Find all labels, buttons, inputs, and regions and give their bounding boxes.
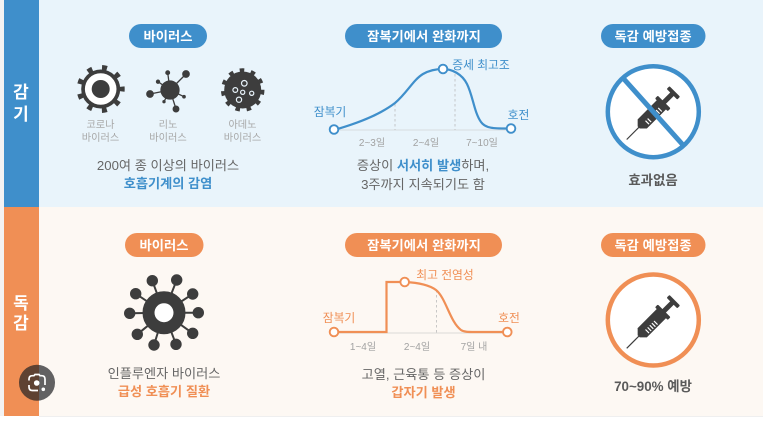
pill heading: cold vaccine: 독감 예방접종 xyxy=(614,29,692,44)
chart: flu symptom curve: 1~4일 xyxy=(350,341,376,353)
pill heading: cold virus: 바이러스 xyxy=(144,29,192,44)
pill heading: flu vaccine: 독감 예방접종 xyxy=(614,238,692,253)
icon: adeno virus xyxy=(223,70,262,110)
chart: cold symptom curve: 7~10일 xyxy=(466,137,498,149)
icon: lens button xyxy=(19,365,55,401)
virus names: 리노 xyxy=(159,119,177,131)
pill heading: flu course xyxy=(345,233,502,257)
text: cold virus description: 200여 종 이상의 바이러스 xyxy=(97,158,239,173)
virus names: 바이러스 xyxy=(149,132,187,144)
chart: cold symptom curve: 증세 최고조 xyxy=(452,58,510,72)
text: flu course description: 갑자기 발생 xyxy=(391,385,456,400)
text: cold virus description xyxy=(97,158,239,191)
cold side label: 감 xyxy=(13,83,29,102)
cold side label: 기 xyxy=(13,105,29,124)
icon: syringe xyxy=(608,274,699,366)
pill heading: cold course: 잠복기에서 완화까지 xyxy=(367,29,481,44)
pill heading: cold course xyxy=(345,24,502,48)
text: flu virus description xyxy=(108,366,220,399)
chart: flu symptom curve xyxy=(323,268,520,353)
text: flu course description: 고열, 근육통 등 증상이 xyxy=(362,367,485,382)
pill heading: flu vaccine xyxy=(601,233,706,257)
chart: cold symptom curve: 2~4일 xyxy=(413,137,439,149)
virus names: 아데노 xyxy=(228,119,257,131)
flu side label xyxy=(4,207,39,416)
panel: flu row xyxy=(4,207,763,416)
flu side label: 독 xyxy=(13,294,29,313)
chart: flu symptom curve: 최고 전염성 xyxy=(416,268,474,282)
flu side label: 감 xyxy=(13,314,29,333)
icon: influenza virus xyxy=(125,275,203,350)
panel: cold row xyxy=(4,0,763,207)
chart: cold symptom curve: 2~3일 xyxy=(359,137,385,149)
text: cold course description xyxy=(357,158,489,192)
pill heading: cold vaccine xyxy=(601,24,706,48)
text: flu virus description: 인플루엔자 바이러스 xyxy=(108,366,220,381)
text: flu vaccine result: 70~90% 예방 xyxy=(614,379,692,394)
text: cold virus description: 호흡기계의 감염 xyxy=(124,176,212,191)
chart: flu symptom curve: 호전 xyxy=(498,311,520,325)
virus names: 바이러스 xyxy=(82,132,119,144)
pill heading: flu course: 잠복기에서 완화까지 xyxy=(367,238,481,253)
text: cold course description: 증상이 서서히 발생하며, xyxy=(357,158,489,173)
icon: rhino virus xyxy=(147,71,189,112)
virus names: 바이러스 xyxy=(224,132,261,144)
chart: flu symptom curve: 7일 내 xyxy=(461,341,487,353)
pill heading: cold virus xyxy=(129,24,207,48)
icon: corona virus xyxy=(79,68,122,110)
chart: flu symptom curve: 2~4일 xyxy=(404,341,430,353)
text: flu course description xyxy=(362,367,485,400)
text: flu virus description: 급성 호흡기 질환 xyxy=(118,384,210,399)
virus names: 코로나 xyxy=(86,119,115,131)
chart: cold symptom curve: 잠복기 xyxy=(314,105,346,119)
icon: crossed-out syringe xyxy=(608,66,699,157)
text: cold vaccine result: 효과없음 xyxy=(628,173,678,188)
chart: cold symptom curve: 호전 xyxy=(508,108,529,122)
chart: cold symptom curve xyxy=(314,58,529,149)
cold side label xyxy=(4,0,39,207)
chart: flu symptom curve: 잠복기 xyxy=(323,311,355,325)
virus names xyxy=(82,119,261,144)
pill heading: flu virus: 바이러스 xyxy=(140,238,188,253)
text: cold course description: 3주까지 지속되기도 함 xyxy=(361,177,485,192)
pill heading: flu virus xyxy=(125,233,204,257)
